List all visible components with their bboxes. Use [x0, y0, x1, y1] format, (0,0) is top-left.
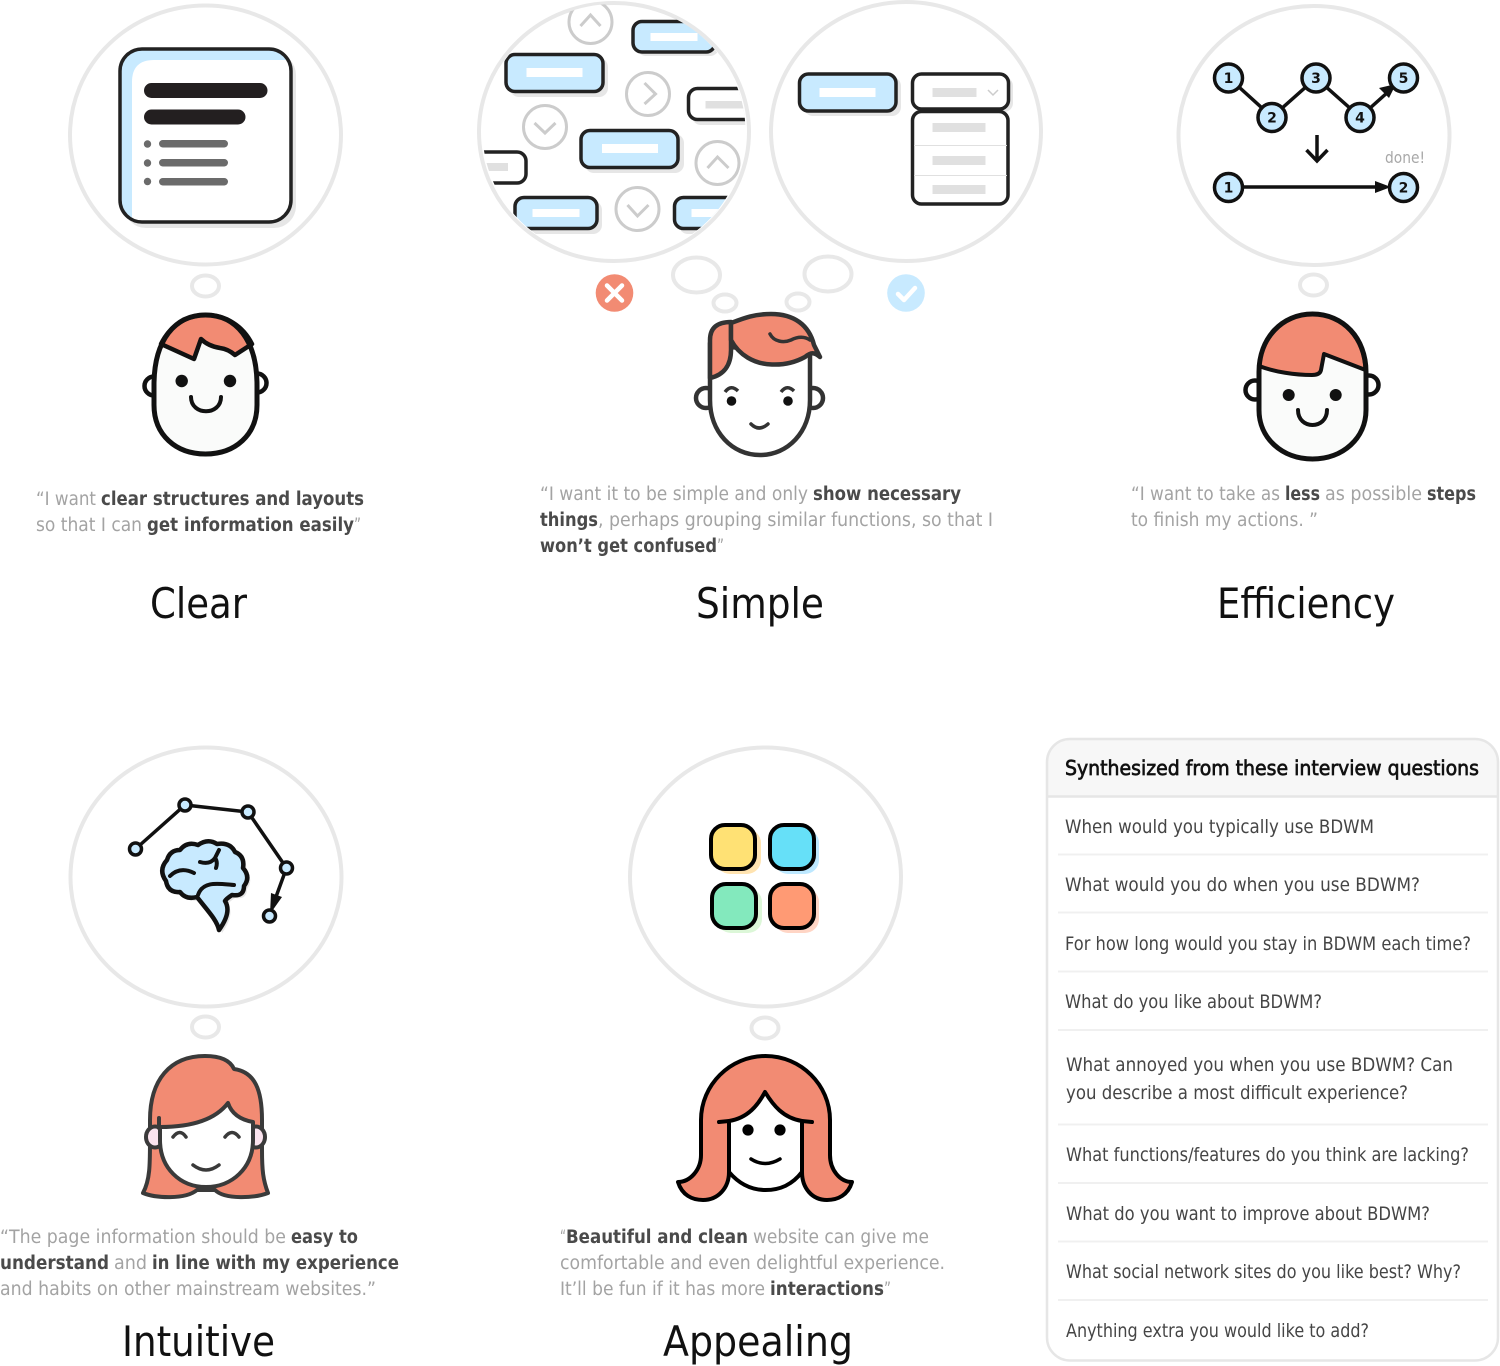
icon: check badge: [887, 274, 925, 312]
quote: Intuitive: and habits on other mainstream websites.”: [0, 1279, 376, 1300]
diagram: five steps reduced to two: 1: [1224, 180, 1233, 196]
thought bubble: Appealing: [630, 748, 901, 1038]
icon: girl face with flipped hair: [678, 1056, 852, 1200]
icon: brain with path: [130, 799, 292, 933]
quote: Clear: [36, 489, 364, 536]
quote: Simple: won’t get confused: [540, 536, 717, 557]
icon: cross badge: [596, 274, 633, 312]
diagram: five steps reduced to two: done!: [1385, 148, 1425, 167]
diagram: five steps reduced to two: 4: [1355, 110, 1365, 126]
panel header: [1047, 739, 1498, 796]
thought bubble: Efficiency: [1178, 6, 1450, 296]
persona: Appealing: [560, 748, 945, 1366]
quote: Appealing: website can give me: [753, 1227, 929, 1248]
quote: Efficiency: “I want to take as: [1131, 484, 1280, 505]
quote: Simple: show necessary: [813, 484, 961, 505]
persona: Clear: [36, 6, 364, 628]
question list: [1065, 816, 1471, 1342]
quote: Simple: “I want it to be simple and only: [540, 484, 808, 505]
quote: Simple: ”: [717, 536, 724, 557]
quote: Intuitive: and: [114, 1253, 147, 1274]
diagram: five steps reduced to two: 1: [1224, 71, 1233, 87]
quote: Appealing: comfortable and even delightful experience.: [560, 1253, 945, 1274]
quote: Simple: [540, 484, 993, 557]
quote: Clear: ”: [354, 515, 361, 536]
quote: Clear: so that I can: [36, 515, 142, 536]
question list: you describe a most difficult experience?: [1066, 1082, 1408, 1104]
thought bubble: simplified interface: [771, 2, 1041, 310]
quote: Simple: , perhaps grouping similar functions, so that I: [598, 510, 993, 531]
heading: Appealing: Appealing: [663, 1317, 853, 1366]
question list: What do you like about BDWM?: [1065, 991, 1322, 1013]
heading: Clear: Clear: [150, 579, 248, 628]
diagram: five steps reduced to two: 5: [1399, 71, 1408, 87]
quote: Appealing: [560, 1227, 945, 1300]
quote: Appealing: interactions: [770, 1279, 884, 1300]
quote: Efficiency: less: [1285, 484, 1320, 505]
question list: What would you do when you use BDWM?: [1065, 874, 1420, 896]
quote: Clear: “I want: [36, 489, 96, 510]
quote: Clear: clear structures and layouts: [101, 489, 364, 510]
persona: Simple: [450, 0, 1041, 628]
heading: Efficiency: Efficiency: [1217, 579, 1395, 628]
panel: interview questions: [1047, 739, 1498, 1360]
thought bubble: cluttered interface: [477, 1, 751, 314]
quote: Intuitive: “The page information should be: [0, 1227, 286, 1248]
persona: Efficiency: [1131, 6, 1476, 628]
quote: Intuitive: understand: [0, 1253, 109, 1274]
icon: girl face with closed eyes: [143, 1056, 268, 1197]
diagram: five steps reduced to two: 2: [1399, 180, 1408, 196]
quote: Appealing: Beautiful and clean: [566, 1227, 748, 1248]
heading: Simple: Simple: [696, 579, 824, 628]
quote: Appealing: ”: [884, 1279, 891, 1300]
question list: Anything extra you would like to add?: [1066, 1320, 1369, 1342]
heading: Intuitive: Intuitive: [122, 1317, 275, 1366]
quote: Intuitive: [0, 1227, 399, 1300]
quote: Intuitive: easy to: [291, 1227, 358, 1248]
icon: document layout: [120, 49, 296, 228]
quote: Clear: get information easily: [147, 515, 354, 536]
icon: boy face with swept hair: [696, 314, 823, 455]
thought bubble: Intuitive: [70, 748, 342, 1038]
diagram: five steps reduced to two: 2: [1267, 110, 1277, 126]
icon: boy face with side parting: [1246, 314, 1378, 459]
quote: Efficiency: steps: [1427, 484, 1476, 505]
quote: Efficiency: to finish my actions. ”: [1131, 510, 1318, 531]
persona: Intuitive: [0, 748, 399, 1366]
quote: Simple: things: [540, 510, 598, 531]
question list: What do you want to improve about BDWM?: [1066, 1203, 1430, 1225]
question list: When would you typically use BDWM: [1065, 816, 1374, 838]
quote: Efficiency: [1131, 484, 1476, 531]
diagram: five steps reduced to two: [1214, 64, 1425, 202]
diagram: five steps reduced to two: 3: [1311, 71, 1321, 87]
panel header: Synthesized from these interview questions: [1065, 756, 1479, 780]
thought bubble: Clear: [70, 6, 341, 296]
quote: Appealing: “: [560, 1227, 566, 1248]
quote: Intuitive: in line with my experience: [152, 1253, 399, 1274]
quote: Appealing: It’ll be fun if it has more: [560, 1279, 765, 1300]
question list: What annoyed you when you use BDWM? Can: [1066, 1054, 1453, 1076]
quote: Efficiency: as possible: [1325, 484, 1422, 505]
icon: boy face with fringe: [144, 315, 266, 454]
icon: colourful app tiles: [711, 825, 819, 933]
